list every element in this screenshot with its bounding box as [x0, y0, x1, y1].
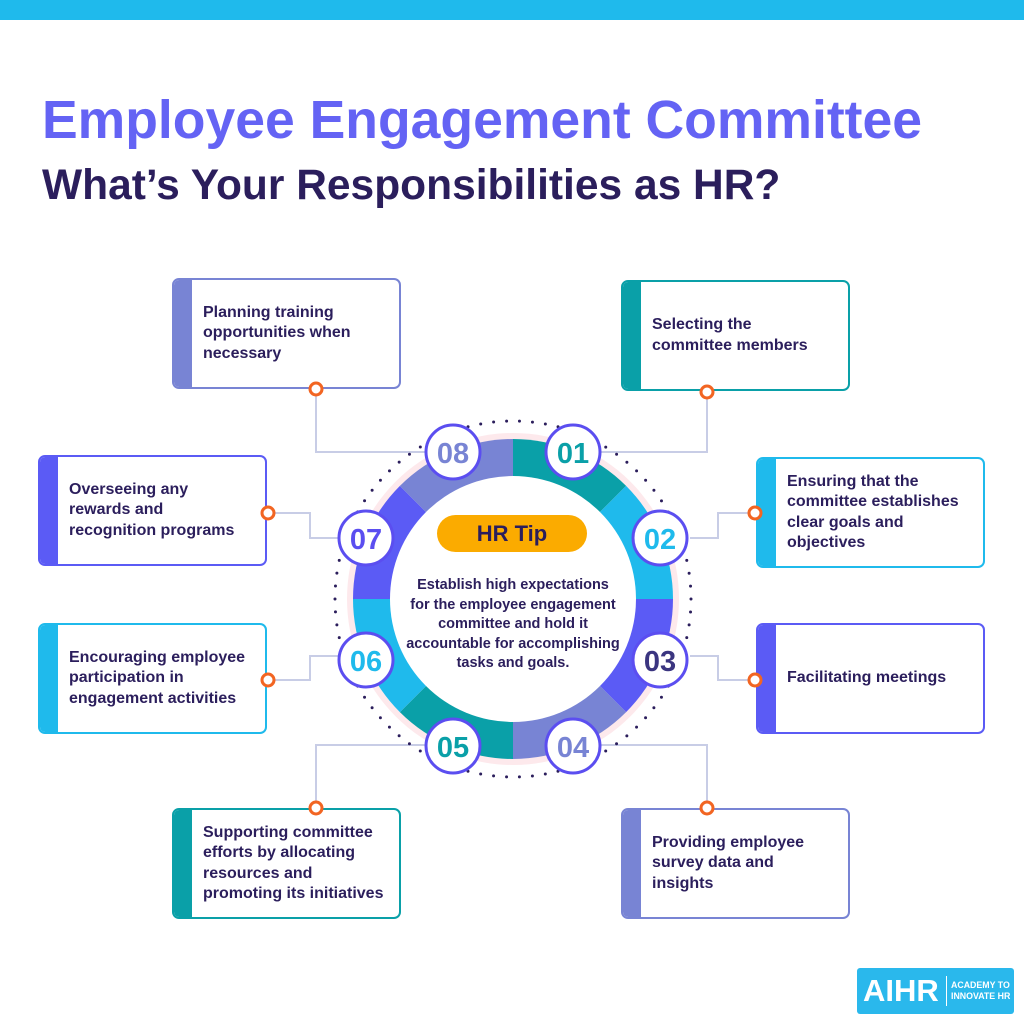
number badges: 03	[644, 646, 676, 678]
logo: INNOVATE HR	[951, 991, 1010, 1001]
box 08: Planning training opportunities when necessary	[203, 304, 351, 362]
number badges: 01	[557, 438, 589, 470]
number badges: 02	[644, 524, 676, 556]
box 07: Overseeing any rewards and recognition programs	[69, 481, 234, 539]
number badges: 05	[437, 732, 469, 764]
number badges	[339, 425, 687, 773]
box 03: Facilitating meetings	[787, 669, 946, 686]
box 02: Ensuring that the committee establishes clear goals and objectives	[787, 472, 959, 551]
box 06: Encouraging employee participation in engagement activities	[69, 649, 245, 707]
HR tip badge	[437, 515, 587, 552]
top bar	[0, 0, 1024, 20]
box 08	[172, 278, 401, 389]
subtitle: What’s Your Responsibilities as HR?	[42, 162, 780, 209]
box 01: Selecting the committee members	[652, 316, 808, 354]
logo: AIHR	[863, 973, 939, 1008]
HR tip text: Establish high expectations for the employee engagement committee and hold it accountable for accomplishing tasks and goals.	[406, 577, 620, 671]
number badges: 06	[350, 646, 382, 678]
box 04: Providing employee survey data and insights	[652, 834, 804, 892]
logo	[857, 968, 1014, 1014]
number badges: 04	[557, 732, 589, 764]
number badges: 08	[437, 438, 469, 470]
box 06	[38, 623, 267, 734]
box 05: Supporting committee efforts by allocating resources and promoting its initiatives	[203, 824, 383, 902]
number badges: 07	[350, 524, 382, 556]
box 02	[756, 457, 985, 568]
HR tip badge: HR Tip	[477, 521, 547, 546]
title: Employee Engagement Committee	[42, 91, 922, 150]
box 04	[621, 808, 850, 919]
logo: ACADEMY TO	[951, 980, 1010, 990]
box 07	[38, 455, 267, 566]
box 03	[756, 623, 985, 734]
box 01	[621, 280, 850, 391]
box 05	[172, 808, 401, 919]
